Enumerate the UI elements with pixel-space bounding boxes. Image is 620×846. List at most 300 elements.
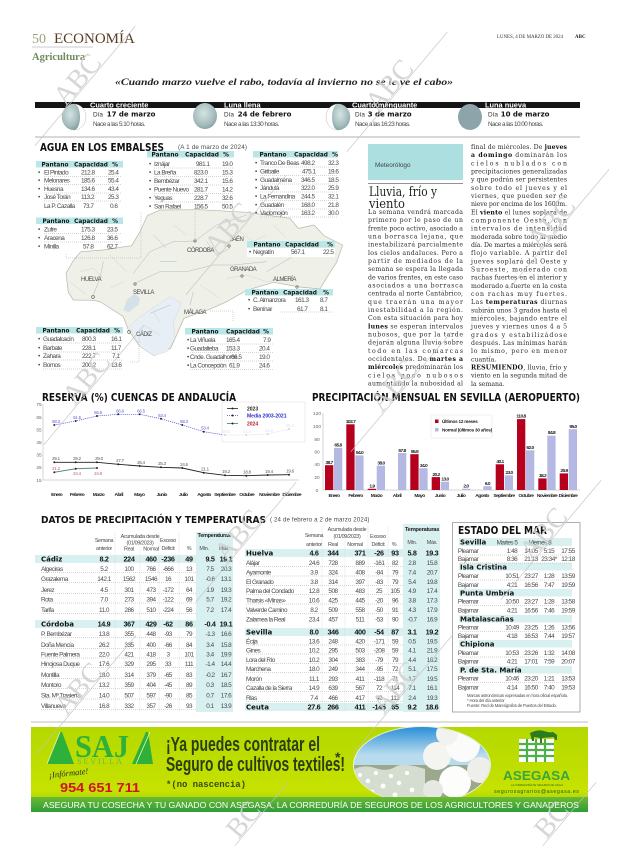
table: Cádiz and Córdoba data: 335 (124, 642, 135, 649)
table: Huelva, Sevilla and Ceuta data: 96 (392, 598, 399, 604)
table: Guadalquivir reservoirs: • (38, 170, 40, 176)
table: Huelva, Sevilla and Ceuta data: 5.4 (408, 579, 417, 586)
table: Cádiz and Córdoba data: 3.4 (206, 652, 215, 658)
table: Almería reservoirs: % (323, 290, 329, 296)
table: Huelva, Sevilla and Ceuta data: Huelva (246, 550, 274, 558)
table: Huelva, Sevilla and Ceuta data: 16.9 (427, 616, 438, 624)
table: Málaga reservoirs (185, 328, 273, 370)
table: Cádiz reservoirs: Capacidad (76, 328, 110, 334)
table: Sierra Norte reservoirs: % (112, 219, 118, 225)
table: Cádiz and Córdoba data: 1.9 (206, 587, 215, 594)
table: Huelva, Sevilla and Ceuta data: 4.1 (408, 648, 417, 654)
table: Cádiz and Córdoba data: Montoro (41, 682, 62, 689)
tide rows: Pleamar (458, 676, 480, 682)
moon: new: Luna nueva (485, 100, 527, 110)
table: Huelva, Sevilla and Ceuta data: 24.6 (309, 560, 320, 567)
table: Huelva, Sevilla and Ceuta data: -118 (374, 676, 385, 683)
month axis: Noviembre (259, 492, 280, 498)
article column 2: cuantía. (471, 356, 496, 363)
article column 1: partir de mediados de la (368, 258, 463, 265)
tide rows: 17:01 (524, 658, 539, 666)
tide rows: 19:59 (561, 582, 576, 589)
table: Huelva, Sevilla and Ceuta data: 383 (355, 657, 366, 664)
moon: new (458, 100, 550, 130)
table: Cádiz and Córdoba data: 69 (186, 596, 193, 604)
tide rows: 10:51 (505, 573, 520, 580)
table: Málaga reservoirs: • (187, 362, 189, 370)
table: Cádiz and Córdoba data: -90 (164, 692, 173, 700)
series: 2023: 26.4 (137, 460, 146, 465)
table: Huelva, Sevilla and Ceuta data: 7.1 (408, 685, 417, 692)
section header (32, 30, 564, 63)
table: Cádiz and Córdoba data: 56 (186, 607, 193, 614)
table: Huelva, Sevilla and Ceuta data: 17.9 (427, 607, 438, 614)
table: Guadalquivir reservoirs: 134.6 (81, 186, 95, 193)
bar value labels: 38.7 (325, 460, 333, 466)
table: Cádiz reservoirs: • (38, 362, 40, 369)
tide rows: 20:07 (561, 658, 576, 666)
article column 2: RESUMIENDO, lluvia, frío y (471, 364, 568, 372)
chart legend (431, 415, 493, 438)
month axis: Junio (435, 493, 446, 499)
table: Cádiz and Córdoba data: P. Bembézar (41, 631, 73, 638)
table: Jaén reservoirs: 30.0 (328, 210, 339, 217)
table: Cádiz reservoirs: Pantano (43, 328, 69, 334)
bar value labels: 110.8 (516, 414, 526, 420)
month axis: Junio (157, 492, 167, 498)
table: Huelva, Sevilla and Ceuta data: -20 (375, 598, 384, 604)
series: 2023: 29.0 (95, 456, 104, 461)
table: Huelva, Sevilla and Ceuta data: 4.4 (408, 657, 417, 664)
series: 2023: 24.6 (180, 462, 189, 467)
article column 1: miércoles predominarán los (368, 364, 463, 371)
table: Huelva, Sevilla and Ceuta data: 408 (355, 570, 366, 576)
watermarks: BC (528, 796, 576, 844)
table: Cádiz and Córdoba data: 3.4 (206, 642, 215, 649)
moon: last quarter: Día 3 de marzo (355, 110, 412, 118)
table: Cádiz and Córdoba data: 295 (146, 661, 157, 668)
table: Córdoba reservoirs: 823.0 (194, 170, 208, 176)
table: Huelva, Sevilla and Ceuta data: 2.4 (408, 695, 417, 702)
ad bottom strip: ASEGURA TU COSECHA Y TU GANADO CON ASEGASA, LA CORREDURÍA DE SEGUROS DE LOS AGRICULTORES Y GANADEROS (43, 800, 579, 810)
panel: state of the sea: Sevilla (460, 538, 487, 546)
table: Málaga reservoirs: Capacidad (226, 330, 260, 336)
table: Granada reservoir (247, 241, 335, 257)
tide rows: Pleamar (458, 573, 480, 580)
table: Huelva, Sevilla and Ceuta data: 49 (376, 695, 383, 702)
panel title: ESTADO DEL MAR (458, 525, 547, 537)
article column 2: precipitaciones generalizadas (471, 168, 567, 176)
table: Málaga reservoirs: • (187, 346, 189, 352)
table: Málaga reservoirs: 153.3 (226, 346, 240, 352)
table: Cádiz and Córdoba data: 286 (124, 607, 135, 614)
ASEGASA logo: LA CORREDURÍA DE SEGUROS DE ASAJA (511, 783, 563, 787)
table: Huelva, Sevilla and Ceuta data: 18.6 (426, 702, 439, 712)
line chart: basin reserves: 35 (36, 452, 42, 458)
series: Media 2003-2021: 58.3 (180, 419, 189, 424)
panel: state of the sea: Isla Cristina (460, 564, 507, 572)
table: Cádiz reservoirs: 13.6 (111, 362, 122, 369)
table: Córdoba reservoirs: • (149, 170, 151, 176)
article column 2: intervalos de intensidad (471, 226, 567, 233)
table: Huelva, Sevilla and Ceuta data: Alájar (246, 560, 261, 567)
article column 2: Las temperaturas diurnas (471, 299, 567, 306)
month axis: Febrero (70, 492, 85, 498)
bars: 30-year normal (334, 429, 577, 490)
table: Huelva, Sevilla and Ceuta data: 15.8 (427, 560, 438, 567)
table: Cádiz and Córdoba data: Mín. (199, 546, 209, 552)
table: Málaga reservoirs: • (187, 337, 189, 344)
table: Huelva, Sevilla and Ceuta data: 10.2 (309, 657, 320, 664)
table: Huelva, Sevilla and Ceuta data (245, 524, 440, 712)
ad headline: * (335, 749, 341, 765)
table: Huelva, Sevilla and Ceuta data: Real (328, 542, 338, 548)
table: Huelva, Sevilla and Ceuta data: Gines (246, 648, 260, 654)
table: Cádiz and Córdoba data: 460 (145, 554, 157, 564)
table: Cádiz and Córdoba data: -236 (161, 554, 175, 564)
map of Andalusia: CÁDIZ (136, 331, 152, 338)
series: Media 2003-2021: 63.4 (158, 413, 167, 418)
table: Cádiz and Córdoba data: Máx. (219, 546, 229, 552)
table: Huelva, Sevilla and Ceuta data: 8.0 (309, 628, 319, 636)
table: Cádiz and Córdoba data: 597 (146, 692, 157, 700)
table: Córdoba reservoirs: 156.5 (194, 204, 208, 210)
panel: state of the sea: Matalascañas (460, 616, 514, 624)
table: Córdoba reservoirs: 50.5 (222, 204, 233, 210)
tide rows (458, 548, 576, 692)
table: Cádiz and Córdoba data: -1.3 (205, 631, 215, 638)
article column 1: asociados a una borrasca (368, 282, 463, 290)
tide rows: 4:21 (507, 582, 518, 589)
table: Huelva, Sevilla and Ceuta data: 3.1 (407, 628, 417, 636)
table: Huelva, Sevilla and Ceuta data: Máx. (427, 540, 437, 546)
table: Guadalquivir reservoirs: Capacidad (74, 162, 108, 168)
table: Huelva, Sevilla and Ceuta data: 23.4 (309, 616, 320, 624)
article column 1: centrada al norte Cantábrico, (368, 291, 463, 298)
tide rows: 16:56 (524, 608, 539, 614)
table: Huelva, Sevilla and Ceuta data: 371 (354, 548, 366, 558)
table: Granada reservoir: Capacidad (285, 242, 319, 248)
article headline: Lluvia, frío y (369, 185, 438, 200)
table: Guadalquivir reservoirs: Huesna (44, 186, 64, 193)
table: Huelva, Sevilla and Ceuta data: 425 (328, 598, 339, 604)
table: Huelva, Sevilla and Ceuta data: 558 (355, 607, 366, 614)
table: Guadalquivir reservoirs: • (38, 178, 40, 184)
bar chart: monthly precipitation: 0 (316, 488, 319, 494)
tide rows: 14:05 (524, 548, 539, 555)
article column 2: rachas fuertes en el interior y (471, 275, 568, 282)
table: Cádiz and Córdoba data: 355 (124, 631, 135, 638)
article column 2: viento en la segunda mitad de (470, 373, 567, 380)
table: Huelva, Sevilla and Ceuta data: 17.3 (427, 598, 438, 604)
article column 1: semana se espera la llegada (368, 266, 463, 273)
table: Huelva, Sevilla and Ceuta data: 2.8 (408, 560, 417, 567)
month axis: Julio (457, 493, 466, 499)
series: 2024: 24.4 (73, 471, 82, 476)
table: Cádiz and Córdoba data: 0.3 (206, 682, 215, 689)
moon: last quarter (326, 100, 417, 130)
table: Huelva, Sevilla and Ceuta data: 3.8 (310, 579, 319, 586)
table: Cádiz and Córdoba data: Real (124, 546, 134, 552)
table: Huelva, Sevilla and Ceuta data: 567 (355, 685, 366, 692)
table: Jaén reservoirs: 475.1 (302, 168, 316, 176)
table: Guadalquivir reservoirs: 25.4 (108, 170, 119, 176)
table: Jaén reservoirs: • (255, 177, 257, 184)
article column 2: a domingo dominarán los (471, 152, 567, 159)
article column 1: todo en las comarcas (368, 348, 463, 355)
tide rows: Pleamar (458, 598, 480, 606)
ASEGASA logo: segurosagrarios@asegasa.es (494, 789, 579, 795)
line chart: basin reserves: 25 (36, 465, 42, 471)
bar chart: monthly precipitation: 40 (314, 462, 320, 468)
article column 2: El viento el lunes soplará de (471, 209, 567, 216)
chart legend: Media 2003-2021 (247, 414, 287, 420)
tide rows: 10:46 (505, 676, 520, 682)
table: Huelva, Sevilla and Ceuta data: -50 (375, 607, 384, 614)
table: Huelva, Sevilla and Ceuta data: Acumulada desde (328, 527, 367, 533)
table: Cádiz and Córdoba data: 16 (165, 576, 172, 583)
month axis: Mayo (134, 492, 145, 498)
tide rows: Bajamar (458, 684, 480, 692)
article column 2: cielos nublados con (471, 160, 567, 167)
series: 2023: 29.1 (52, 456, 61, 461)
table: Cádiz and Córdoba data: 17.6 (221, 692, 232, 700)
tide rows: 1:32 (544, 650, 555, 657)
tide rows: 7:47 (544, 582, 555, 589)
table: Cádiz and Córdoba data: 314 (124, 672, 135, 679)
moon: first quarter: Nace a las 5:10 horas. (93, 121, 146, 128)
table: Huelva, Sevilla and Ceuta data: 18.0 (309, 666, 320, 673)
table: Cádiz and Córdoba data: Exceso (160, 538, 176, 544)
map of Andalusia: GRANADA (230, 267, 257, 273)
panel: state of the sea: Punta Umbría (460, 590, 514, 598)
table: Cádiz reservoirs: % (114, 328, 120, 334)
table: Málaga reservoirs: 20.4 (259, 346, 270, 352)
tide rows: 10:53 (505, 650, 520, 657)
article column 1 (368, 209, 464, 388)
table: Guadalquivir reservoirs: 25.3 (108, 194, 119, 201)
tide rows: 5:15 (544, 548, 555, 555)
table: Cádiz and Córdoba data: 448 (146, 631, 157, 638)
section title: ECONOMÍA (54, 30, 135, 47)
table: Huelva, Sevilla and Ceuta data: 4.3 (408, 607, 417, 614)
table: Málaga reservoirs: • (187, 354, 189, 361)
table: Huelva, Sevilla and Ceuta data: 503 (355, 648, 366, 654)
table: Cádiz and Córdoba data: Temperaturas (198, 533, 231, 539)
table: Cádiz and Córdoba data: 3 (166, 652, 170, 658)
table: Huelva, Sevilla and Ceuta data: 400 (354, 628, 366, 636)
bars: last 12 months (325, 419, 568, 490)
table: Huelva, Sevilla and Ceuta data: -26 (374, 548, 384, 558)
table: Córdoba reservoirs: • (149, 186, 151, 194)
panel notes: Fuente: Red de Mareógrafos de Puertos del Estado. (467, 703, 557, 708)
line chart: basin reserves: 65 (36, 415, 42, 421)
table: Cádiz and Córdoba data: -0.6 (205, 576, 215, 583)
table: Cádiz and Córdoba data: -93 (164, 631, 173, 638)
table: Málaga reservoirs: Guadalteba (190, 346, 219, 352)
table: Málaga reservoirs: 61.9 (229, 362, 240, 370)
table: Córdoba reservoirs: 15.6 (222, 178, 233, 185)
month axis: Julio (179, 492, 188, 498)
table: Cádiz and Córdoba data: 357 (146, 703, 157, 710)
date line: LUNES, 4 DE MARZO DE 2024 (497, 35, 564, 40)
table: Sierra Norte reservoirs: 23.5 (107, 226, 118, 234)
table: Huelva, Sevilla and Ceuta data: 114 (391, 685, 400, 692)
table: Cádiz and Córdoba data: Córdoba (41, 620, 74, 628)
table: Jaén reservoirs: 322.0 (301, 185, 315, 192)
table: Cádiz and Córdoba data: % (187, 546, 192, 552)
moon: new: Día 10 de marzo (488, 110, 550, 118)
table: Cádiz and Córdoba data: 7.2 (206, 607, 215, 614)
table: Cádiz reservoirs: Barbate (43, 345, 63, 352)
line chart: basin reserves (36, 391, 305, 498)
table: Huelva, Sevilla and Ceuta data: Lora del Río (246, 657, 276, 664)
table: Huelva, Sevilla and Ceuta data: Marchena (246, 666, 271, 673)
article column 2: miércoles, bajando entre el (471, 316, 567, 322)
table: Cádiz and Córdoba data: 20.3 (221, 566, 232, 573)
table: Huelva, Sevilla and Ceuta data: 79 (392, 657, 399, 664)
table: Huelva, Sevilla and Ceuta data: Écija (246, 636, 258, 646)
table: Málaga reservoirs: Cnde. Guadalhorce (190, 354, 238, 361)
table: Cádiz and Córdoba data: -1.4 (205, 661, 215, 668)
table: Huelva, Sevilla and Ceuta data: 9.2 (407, 702, 417, 712)
tide rows: Pleamar (458, 650, 480, 657)
table: Cádiz reservoirs: • (38, 336, 40, 343)
table: Cádiz reservoirs: Bornos (43, 362, 61, 369)
table: Huelva, Sevilla and Ceuta data: -95 (375, 666, 384, 673)
article column 1: inestabilidad a la región. (368, 307, 463, 314)
month axis: Octubre (239, 492, 255, 498)
table: Huelva, Sevilla and Ceuta data: -145 (372, 702, 386, 712)
table: Cádiz and Córdoba data: 101 (184, 576, 195, 583)
bar chart: monthly precipitation: 100 (313, 424, 321, 430)
table: Huelva, Sevilla and Ceuta data: 13.6 (309, 638, 320, 646)
article headline (368, 185, 438, 212)
table: Cádiz reservoirs: 16.1 (111, 336, 122, 343)
table: Huelva, Sevilla and Ceuta data: 249 (328, 666, 339, 673)
table: Guadalquivir reservoirs: 73.7 (83, 203, 94, 210)
chart legend: Normal (últimos 30 años) (442, 428, 493, 432)
panel: state of the sea: Chipiona (460, 640, 495, 648)
table: Huelva, Sevilla and Ceuta data: 59 (392, 638, 399, 646)
table: Cádiz and Córdoba data: Fuente Palmera (41, 652, 80, 658)
table: Almería reservoirs: Pantano (252, 290, 278, 296)
table: Cádiz and Córdoba data: -224 (163, 607, 174, 614)
table: Córdoba reservoirs: Capacidad (185, 152, 219, 158)
table: Sierra Norte reservoirs: Aracena (44, 235, 65, 242)
table: Cádiz and Córdoba data: -45 (164, 682, 173, 689)
moon: last quarter: Nace a las 16:23 horas. (355, 121, 411, 128)
table: Huelva, Sevilla and Ceuta data: 20.7 (427, 570, 438, 576)
bar value labels: 25.9 (560, 468, 568, 474)
tide rows: 1:28 (544, 598, 555, 606)
table: Jaén reservoirs: 18.5 (328, 177, 339, 184)
table: Jaén reservoirs: Capacidad (294, 152, 328, 158)
table: Huelva, Sevilla and Ceuta data: 7.4 (310, 695, 319, 702)
table: Huelva, Sevilla and Ceuta data: 19.5 (427, 638, 438, 646)
bar value labels: 6.0 (485, 481, 491, 487)
table: Cádiz and Córdoba data: 19.1 (220, 620, 233, 628)
table: Cádiz and Córdoba data: -65 (164, 672, 173, 679)
panel notes: * Hora del día anterior (467, 698, 505, 703)
table: Jaén reservoirs: Jándula (260, 185, 280, 192)
chart title: RESERVA (%) CUENCAS DE ANDALUCÍA (42, 391, 236, 404)
line chart: basin reserves: 75 (36, 402, 42, 408)
panel: weather article (368, 144, 568, 388)
table: Córdoba reservoirs: • (149, 204, 151, 210)
tide rows: 4:18 (507, 633, 518, 640)
table: Málaga reservoirs: La Viñuela (190, 337, 216, 344)
table: Guadalquivir reservoirs: 55.4 (108, 178, 119, 184)
ad bottom strip (31, 797, 588, 812)
table: Granada reservoir: 22.5 (323, 249, 334, 256)
moon phases panel (35, 100, 580, 130)
table: Cádiz and Córdoba data: 14.0 (99, 692, 110, 700)
table: Guadalquivir reservoirs: • (38, 194, 40, 201)
table: Cádiz reservoirs (36, 327, 123, 369)
article column 1: de varios frentes, en este caso (368, 274, 463, 281)
table: Sierra Norte reservoirs: Minilla (44, 244, 60, 250)
bar chart: monthly precipitation: 20 (314, 475, 320, 481)
series: 2023: 21.1 (201, 466, 210, 472)
table: Córdoba reservoirs: 228.7 (194, 195, 208, 202)
table: Cádiz and Córdoba data: Jerez (41, 587, 54, 594)
table: Huelva, Sevilla and Ceuta data: Morón (246, 676, 263, 683)
table: Málaga reservoirs: % (263, 330, 269, 336)
table: Guadalquivir reservoirs: La P. Cazalla (44, 203, 76, 210)
tide rows: 21:13 (524, 556, 539, 563)
table: Cádiz and Córdoba data: Villanueva (41, 703, 66, 710)
tide rows: Bajamar (458, 658, 480, 666)
table: Cádiz and Córdoba data: 16.6 (221, 631, 232, 638)
table: Cádiz and Córdoba data: -66 (164, 642, 173, 649)
table: Huelva, Sevilla and Ceuta data: 3.9 (310, 570, 319, 576)
table: Guadalquivir reservoirs: • (38, 186, 40, 193)
series: 2023: 27.7 (116, 458, 125, 463)
watermarks: ABC (47, 48, 108, 112)
map of Andalusia: HUELVA (81, 277, 102, 283)
table: Cádiz and Córdoba data: Normal (143, 546, 159, 552)
table: Cádiz and Córdoba data: 16.8 (99, 703, 110, 710)
article column 2: final de miércoles. De jueves (471, 144, 568, 151)
table: Jaén reservoirs: 346.5 (301, 177, 315, 184)
chart legend (222, 402, 305, 442)
table: Córdoba reservoirs: Puente Nuevo (154, 186, 189, 194)
bar chart: monthly precipitation: 80 (314, 437, 320, 443)
table: Huelva, Sevilla and Ceuta data: Mín. (407, 540, 417, 546)
table: Huelva, Sevilla and Ceuta data: 4.6 (309, 548, 319, 558)
article column 1: Con esta situación para hoy (368, 315, 464, 322)
table: Cádiz and Córdoba data: 473 (146, 587, 157, 594)
bar value labels: 65.8 (334, 442, 342, 448)
article column 2: jueves soplará del Oeste y (470, 258, 568, 265)
table: Huelva, Sevilla and Ceuta data: 0.5 (408, 638, 417, 646)
watermarks: ABC (365, 656, 426, 720)
table: Jaén reservoirs (253, 151, 339, 217)
table: Huelva, Sevilla and Ceuta data: Cazalla de la Sierra (246, 685, 293, 692)
table: Cádiz and Córdoba data: 429 (145, 620, 157, 628)
table: Cádiz and Córdoba data: 86 (185, 620, 193, 628)
table: Huelva, Sevilla and Ceuta data: -84 (375, 570, 384, 576)
table: Guadalquivir reservoirs: 212.8 (81, 170, 95, 176)
table: Cádiz reservoirs: • (38, 353, 40, 360)
watermarks: ABC (208, 504, 269, 568)
table: Cádiz and Córdoba data: 301 (124, 587, 135, 594)
article column 2: moderada sobre todo al medio (471, 234, 567, 241)
tide rows: 12:18 (561, 556, 576, 563)
ASAJA logo: SAJ (75, 728, 129, 764)
article column 1: frente poco activo, asociado a (368, 225, 463, 232)
